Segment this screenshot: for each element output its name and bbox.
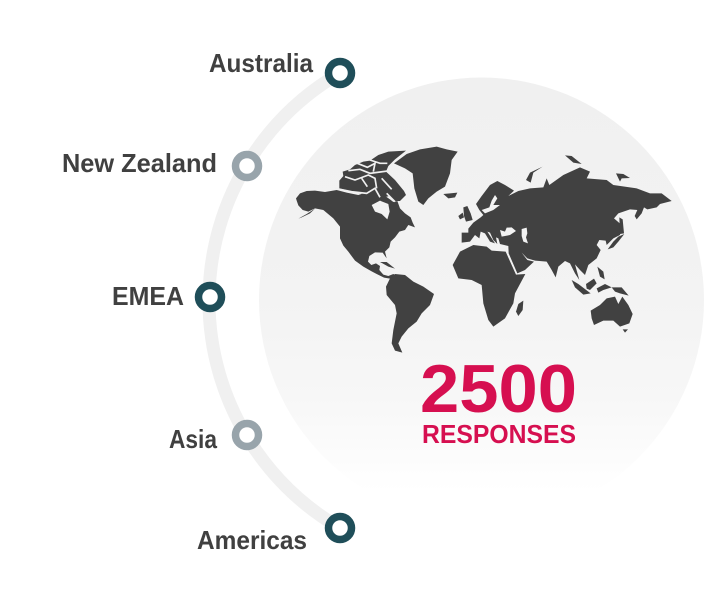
North America <box>296 190 415 279</box>
Greenland <box>394 147 458 205</box>
Iceland <box>443 193 457 198</box>
Madagascar <box>516 301 523 316</box>
marker: New Zealand <box>236 154 258 178</box>
headline number: 2500 <box>420 351 577 427</box>
Africa <box>453 245 525 327</box>
globe background circle <box>259 78 704 522</box>
world map: Eurasia, Africa, Australia <box>453 155 672 333</box>
label: EMEA: EMEA <box>112 281 184 311</box>
Arctic channels <box>335 160 395 202</box>
Borneo <box>586 279 597 290</box>
Japan <box>608 234 624 249</box>
label: New Zealand: New Zealand <box>62 148 217 178</box>
marker: EMEA <box>198 286 222 308</box>
label: Asia: Asia <box>169 424 217 454</box>
marker: Asia <box>236 424 258 446</box>
Tasmania <box>623 329 628 333</box>
Eurasia <box>462 167 672 280</box>
world map: Americas and Greenland <box>296 147 458 353</box>
Novaya Zemlya <box>526 167 543 183</box>
Sakhalin <box>619 217 624 234</box>
label: Australia: Australia <box>209 48 314 78</box>
Australia <box>591 297 633 327</box>
Philippines <box>597 267 605 279</box>
marker: Australia <box>328 62 352 84</box>
marker: Americas <box>328 516 352 540</box>
Alaska peninsula <box>298 209 315 219</box>
Svalbard <box>565 155 582 164</box>
Arctic archipelago <box>339 151 406 201</box>
New Siberian Islands <box>616 173 630 182</box>
curved connector <box>209 73 340 528</box>
British Isles <box>463 206 473 222</box>
South America <box>386 274 434 353</box>
label: Americas: Americas <box>197 525 307 555</box>
New Guinea <box>612 287 629 296</box>
Sumatra and Java <box>572 280 591 295</box>
subheading: RESPONSES <box>422 419 576 449</box>
Sulawesi and islands <box>597 284 612 293</box>
Caribbean islands <box>380 262 395 269</box>
